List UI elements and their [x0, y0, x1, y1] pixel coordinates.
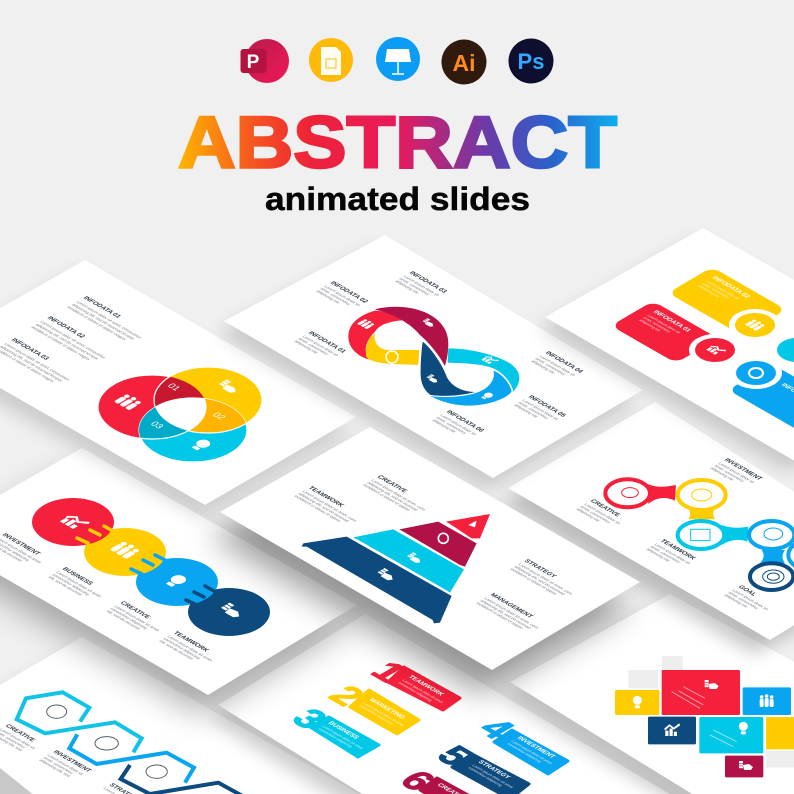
label: business: elit, sed do eiusmod [47, 575, 84, 596]
card: blue [728, 334, 794, 433]
card: red [611, 301, 741, 366]
circle chain [32, 498, 270, 636]
label: creative: CREATIVE [118, 600, 152, 620]
card text: strategy: Lorem ipsum dolor sit amet [471, 764, 515, 789]
card text: strategy [467, 759, 523, 792]
label: infodata 06: INFODATA 06 [444, 409, 486, 433]
label: infodata 02: adipiscing elit [315, 289, 342, 305]
panel: cards slide [539, 228, 794, 472]
label: creative: CREATIVE [588, 498, 622, 518]
number 5: 5 [428, 740, 482, 771]
panel: circles slide [0, 448, 357, 715]
label: infodata 02: INFODATA 02 [45, 315, 87, 339]
hexagon chain [17, 692, 247, 794]
label: investment: Lorem ipsum dolor sit [46, 754, 86, 776]
icon: illustrator [442, 40, 486, 84]
label: strategy: incididunt ut labore et dolore [509, 567, 559, 596]
label: creative [105, 600, 168, 637]
card text: investment: Lorem ipsum dolor sit amet [510, 740, 554, 765]
card text: marketing [358, 697, 414, 730]
card text: infodata 02: INFODATA 02 [710, 275, 752, 299]
label: infodata 01: amet, consectetur [297, 337, 331, 356]
label: creative [575, 498, 629, 530]
venn diagram [98, 367, 262, 462]
label: investment: INVESTMENT [51, 749, 93, 773]
label: infodata 03: adipiscing elit [394, 279, 421, 295]
label: infodata 06: adipiscing elit [431, 418, 458, 434]
card text: teamwork: Lorem ipsum dolor sit amet [401, 679, 445, 704]
label: creative: incididunt ut labore et dolore [362, 483, 412, 512]
card text: infodata 02: adipiscing elit [697, 285, 721, 299]
label: teamwork [293, 485, 365, 527]
label: infodata 02: Lorem ipsum dolor sit [323, 285, 363, 307]
numbered cards [310, 667, 568, 794]
label: investment: amet, consectetur [713, 464, 747, 483]
icon: powerpoint: P [247, 52, 260, 73]
label: infodata 06: amet, consectetur [435, 416, 469, 435]
label: investment: amet, consectetur [42, 756, 76, 775]
label: creative: Lorem ipsum dolor sit [583, 503, 623, 525]
icon: photoshop: Ps [518, 49, 544, 74]
label: creative: CREATIVE [3, 723, 37, 743]
label: infodata 01: incididunt ut labore et dolore magna [66, 305, 128, 341]
mosaic tiles [615, 656, 794, 777]
card text: business [317, 720, 373, 753]
label: infodata 04: amet, consectetur [534, 357, 568, 376]
label: infodata 05: adipiscing elit [513, 403, 540, 419]
label: business: Lorem ipsum dolor sit amet [55, 571, 103, 598]
label: creative: CREATIVE [375, 474, 409, 494]
number 4: 4 [470, 713, 525, 745]
label: teamwork: Lorem ipsum dolor sit [653, 543, 693, 565]
label: strategy [509, 558, 581, 600]
card text: infodata 02: Lorem ipsum dolor sit [705, 280, 741, 301]
card text: infodata 01 [638, 309, 693, 341]
panel: infinity slide [218, 235, 643, 490]
label: management: MANAGEMENT [488, 592, 534, 619]
label: management: incididunt ut labore et dolore [475, 601, 525, 630]
panel: numbered slide [210, 614, 692, 794]
label: investment [38, 749, 93, 781]
label: infodata 05: INFODATA 05 [526, 394, 568, 418]
card text: investment: INVESTMENT [515, 735, 557, 759]
card text: business: BUSINESS [326, 720, 360, 740]
card text: infodata 01: Lorem ipsum dolor sit [646, 314, 682, 335]
app icons row [240, 37, 554, 84]
label: teamwork: adipiscing elit, sed do eiusmod [297, 492, 351, 523]
label: creative: amet, consectetur [579, 505, 613, 524]
label: teamwork: consectetur adipiscing [162, 637, 203, 660]
number 1: 1 [362, 656, 416, 687]
label: infodata 02: incididunt ut labore et dolore magna [30, 325, 92, 361]
label: infodata 02 [30, 315, 116, 365]
label: management: adipiscing elit, sed do eiusmod [479, 599, 533, 630]
label: creative: adipiscing elit [575, 507, 602, 523]
card text: business: Lorem ipsum dolor sit amet [321, 725, 365, 750]
panel: pyramid slide [210, 427, 640, 694]
label: investment: INVESTMENT [722, 457, 764, 481]
label: teamwork [645, 538, 699, 570]
label: infodata 02 [315, 280, 370, 312]
label: infodata 06: Lorem ipsum dolor sit [439, 414, 479, 436]
label: strategy: Lorem ipsum dolor sit amet, cons [517, 563, 574, 595]
label: infodata 04 [530, 350, 585, 382]
card text: business: consectetur adipiscing [317, 727, 353, 748]
label: infodata 02: adipiscing elit, sed do eiusmod tempor [35, 323, 101, 361]
label: management [475, 592, 547, 634]
label: teamwork: Lorem ipsum dolor sit amet, cons [301, 490, 358, 522]
label: investment: adipiscing elit, sed [38, 758, 72, 778]
label: creative [362, 474, 434, 516]
icon: keynote [376, 37, 420, 81]
label: infodata 02: Lorem ipsum dolor sit amet, consectetur [39, 320, 108, 360]
label: teamwork: adipiscing elit [645, 547, 672, 563]
ring network [605, 479, 794, 590]
panel: venn slide [0, 260, 356, 517]
label: infodata 03: INFODATA 03 [9, 337, 51, 361]
icon: photoshop [508, 38, 554, 84]
card text: marketing: Lorem ipsum dolor sit amet [362, 702, 406, 727]
label: infodata 01: adipiscing elit [293, 339, 320, 355]
label: infodata 04: Lorem ipsum dolor sit [538, 355, 578, 377]
label: creative [0, 723, 44, 755]
label: creative: elit, sed do eiusmod [105, 609, 142, 630]
panel: network slide [502, 402, 794, 654]
card text: marketing: MARKETING [367, 697, 407, 720]
label: investment: Lorem ipsum dolor sit [717, 462, 757, 484]
label: infodata 01 [293, 330, 348, 362]
card text: infodata 01: adipiscing elit [638, 319, 662, 333]
label: teamwork: elit, sed do eiusmod [158, 639, 195, 660]
label: strategy: adipiscing elit, sed do eiusmod [513, 565, 567, 596]
label: infodata 05: amet, consectetur [517, 401, 551, 420]
label: goal: amet, consectetur [727, 591, 761, 610]
label: infodata 05: Lorem ipsum dolor sit [521, 399, 561, 421]
label: investment [0, 532, 50, 569]
label: infodata 01: INFODATA 01 [81, 295, 123, 319]
label: creative: Lorem ipsum dolor sit amet, cons [370, 479, 427, 511]
label: creative: consectetur adipiscing [109, 607, 150, 630]
venn label 01: 01 [165, 382, 183, 392]
label: teamwork: TEAMWORK [658, 538, 698, 561]
label: goal: GOAL [736, 584, 758, 597]
label: infodata 01: INFODATA 01 [306, 330, 348, 354]
infinity loop [348, 307, 519, 406]
label: infodata 03 [0, 337, 80, 387]
icon: powerpoint [240, 39, 289, 83]
label: infodata 05 [513, 394, 568, 426]
label: infodata 04: adipiscing elit [530, 359, 557, 375]
card text: infodata 02 [697, 275, 752, 307]
label: strategy: STRATEGY [522, 558, 558, 579]
label: infodata 02: amet, consectetur [319, 287, 353, 306]
card text: investment: consectetur adipiscing [506, 742, 542, 763]
label: creative: Lorem ipsum dolor sit amet [113, 605, 161, 632]
label: infodata 01 [66, 295, 152, 345]
label: business: consectetur adipiscing [51, 573, 92, 596]
label: goal [723, 584, 777, 616]
pyramid [302, 514, 490, 623]
label: investment: adipiscing elit [709, 466, 736, 482]
venn label 02: 02 [210, 411, 228, 421]
card text: teamwork: consectetur adipiscing [397, 681, 433, 702]
label: teamwork [158, 630, 221, 667]
label: teamwork: Lorem ipsum dolor sit amet [166, 635, 214, 662]
label: teamwork: amet, consectetur [649, 545, 683, 564]
card text: strategy: STRATEGY [476, 759, 512, 780]
panel: hexagon slide [0, 637, 370, 794]
card text: marketing: consectetur adipiscing [358, 704, 394, 725]
card text: teamwork [397, 674, 453, 707]
label: teamwork: TEAMWORK [306, 485, 346, 508]
label: infodata 03: INFODATA 03 [407, 270, 449, 294]
title: ABSTRACT [178, 102, 617, 184]
label: infodata 01: Lorem ipsum dolor sit [301, 335, 341, 357]
card text: infodata 02: amet, consectetur [701, 282, 731, 300]
card text: strategy: consectetur adipiscing [467, 766, 503, 787]
label: infodata 03: amet, consectetur [398, 277, 432, 296]
label: teamwork: incididunt ut labore et dolore [293, 494, 343, 523]
number 2: 2 [320, 680, 374, 711]
icon: google slides [309, 38, 353, 82]
label: infodata 03: adipiscing elit, sed do eiusmod tempor [0, 345, 65, 383]
label: goal: Lorem ipsum dolor sit [731, 589, 771, 611]
label: investment [709, 457, 764, 489]
label: business: BUSINESS [60, 566, 94, 586]
label: infodata 04: INFODATA 04 [543, 350, 585, 374]
label: creative: adipiscing elit, sed do eiusmod [366, 481, 420, 512]
venn label 03: 03 [148, 420, 166, 430]
card text: investment [506, 735, 562, 768]
label: infodata 06 [431, 409, 486, 441]
icon: illustrator: Ai [452, 50, 476, 76]
label: teamwork: TEAMWORK [171, 630, 211, 653]
label: business [47, 566, 110, 603]
subtitle: animated slides [265, 181, 530, 217]
card text: infodata 01: amet, consectetur [642, 316, 672, 334]
card text: teamwork: TEAMWORK [406, 674, 446, 697]
card: yellow [668, 267, 786, 341]
number 3: 3 [283, 703, 337, 734]
label: infodata 02: INFODATA 02 [328, 280, 370, 304]
card text: infodata 01: INFODATA 01 [651, 309, 693, 333]
label: management: Lorem ipsum dolor sit amet, cons [483, 597, 540, 629]
label: infodata 03: Lorem ipsum dolor sit [402, 275, 442, 297]
label: infodata 01: Lorem ipsum dolor sit amet, consectetur [75, 300, 144, 340]
label: infodata 03: Lorem ipsum dolor sit amet, consectetur [3, 342, 72, 382]
label: investment: INVESTMENT [0, 532, 42, 556]
label: infodata 03 [394, 270, 449, 302]
panel: mosaic slide [502, 594, 794, 794]
label: infodata 01: adipiscing elit, sed do eiusmod tempor [71, 303, 137, 341]
label: goal: adipiscing elit [723, 593, 750, 609]
